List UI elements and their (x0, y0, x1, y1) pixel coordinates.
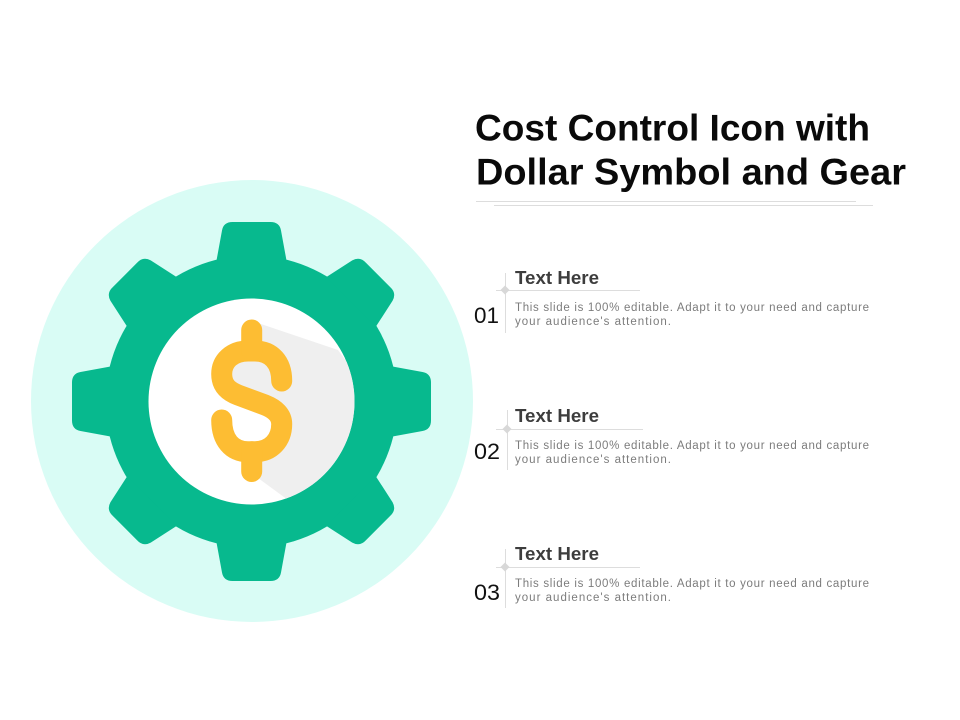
list item 02: This slide is 100% editable. Adapt it to your need and capture (515, 440, 869, 452)
list item 02: your audience's attention. (515, 454, 671, 466)
title (475, 108, 906, 192)
list item 01: This slide is 100% editable. Adapt it to your need and capture (515, 302, 869, 314)
list item 03 (474, 544, 869, 608)
long shadow of dollar sign (232, 324, 354, 498)
list item 03: 03 (474, 580, 500, 605)
title: Cost Control Icon with (475, 108, 870, 148)
icon: gear (72, 222, 431, 581)
title divider (476, 202, 873, 206)
list item 02 (474, 406, 869, 470)
list item 01: your audience's attention. (515, 316, 671, 328)
background circle (31, 180, 473, 622)
list item 02: Text Here (515, 406, 599, 426)
list item 03: your audience's attention. (515, 592, 671, 604)
title: Dollar Symbol and Gear (476, 152, 906, 192)
icon: dollar sign (222, 330, 282, 472)
list item 02: 02 (474, 439, 500, 464)
list item 01: Text Here (515, 268, 599, 288)
list item 01: 01 (474, 303, 499, 328)
list item 01 (474, 268, 869, 333)
gear centre disc (148, 298, 354, 504)
list item 03: This slide is 100% editable. Adapt it to your need and capture (515, 578, 869, 590)
list item 03: Text Here (515, 544, 599, 564)
